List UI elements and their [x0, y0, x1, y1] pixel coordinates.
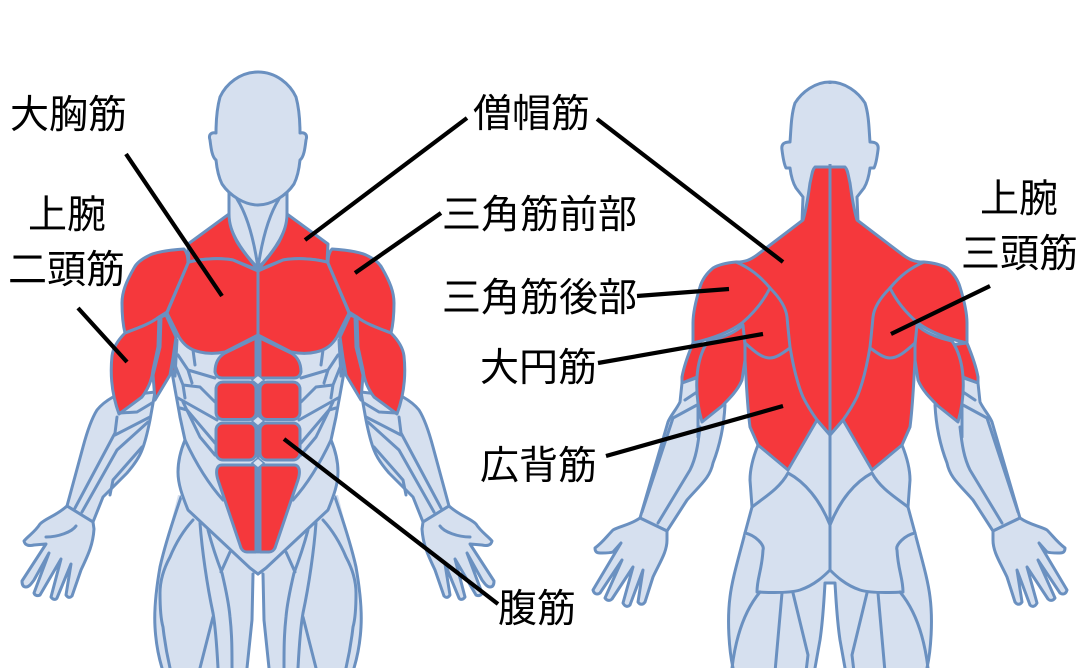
- pointer: 三頭筋: [891, 286, 990, 334]
- abs row 3: [216, 423, 256, 460]
- pointer: 二頭筋: [78, 308, 127, 362]
- thigh lines: [160, 520, 232, 668]
- spine line: [828, 167, 832, 570]
- label: 二頭筋: 二頭筋: [8, 249, 125, 292]
- label: 三角筋後部: 三角筋後部: [442, 277, 637, 320]
- front figure right half: [258, 72, 494, 668]
- label: 上腕 (biceps): 上腕: [28, 194, 106, 237]
- back forearm: [640, 375, 725, 531]
- back figure left half: [593, 82, 830, 668]
- brachialis strip: [153, 315, 176, 400]
- centre line: [256, 268, 260, 552]
- pointer: 大円筋: [598, 334, 763, 363]
- pectoralis major: [167, 259, 258, 354]
- abs row 2: [216, 382, 256, 420]
- thumb crease: [46, 526, 76, 537]
- lower back and glute lines: [745, 473, 830, 593]
- label: 三角筋前部: 三角筋前部: [442, 194, 637, 237]
- front hand: [22, 506, 94, 599]
- label: 上腕 (triceps): 上腕: [980, 178, 1058, 221]
- trapezius front: [188, 214, 258, 270]
- pointer: 広背筋: [606, 406, 783, 456]
- label: 広背筋: 広背筋: [480, 445, 597, 488]
- neck: [229, 188, 258, 274]
- back leg: [729, 525, 830, 668]
- hamstring lines: [732, 592, 808, 668]
- rib and oblique lines: [175, 350, 223, 500]
- abs row 4: [217, 465, 256, 552]
- trapezius and latissimus: [737, 167, 830, 470]
- anterior deltoid: [122, 249, 188, 333]
- label: 僧帽筋: 僧帽筋: [473, 93, 590, 136]
- front figure left half: [22, 72, 258, 668]
- posterior deltoid: [693, 262, 770, 343]
- front forearm: [67, 392, 155, 522]
- lower back: [745, 420, 830, 592]
- back figure right half: [830, 82, 1067, 668]
- back forearm lines: [642, 380, 700, 523]
- label: 大円筋: 大円筋: [480, 347, 597, 390]
- small forearm strip: [172, 340, 177, 376]
- back head: [782, 82, 830, 224]
- back hand: [593, 518, 667, 606]
- label: 三頭筋: 三頭筋: [961, 233, 1078, 276]
- front leg: [155, 495, 258, 668]
- teres major outline: [737, 262, 830, 435]
- front torso: [172, 330, 258, 574]
- front figure: [22, 72, 494, 668]
- label: 大胸筋: 大胸筋: [10, 94, 127, 137]
- abs row 1: [215, 338, 256, 378]
- pointer: 三角筋前部: [355, 213, 441, 273]
- triceps outer strip: [682, 343, 710, 383]
- pointer: 三角筋後部: [637, 289, 729, 296]
- front head: [209, 72, 258, 205]
- pointer: 腹筋: [284, 439, 498, 604]
- pointer: 僧帽筋 front: [305, 118, 467, 240]
- triceps inner: [697, 325, 745, 422]
- back head fill seam cover: [828, 84, 832, 164]
- forearm lines: [75, 403, 152, 512]
- biceps: [111, 317, 159, 414]
- neck lines: [229, 199, 258, 268]
- back figure: [593, 82, 1067, 668]
- label: 腹筋: 腹筋: [498, 588, 576, 631]
- pointer: 大胸筋: [126, 154, 222, 296]
- pointer: 僧帽筋 back: [597, 119, 783, 262]
- abs centre diamonds: [252, 375, 264, 468]
